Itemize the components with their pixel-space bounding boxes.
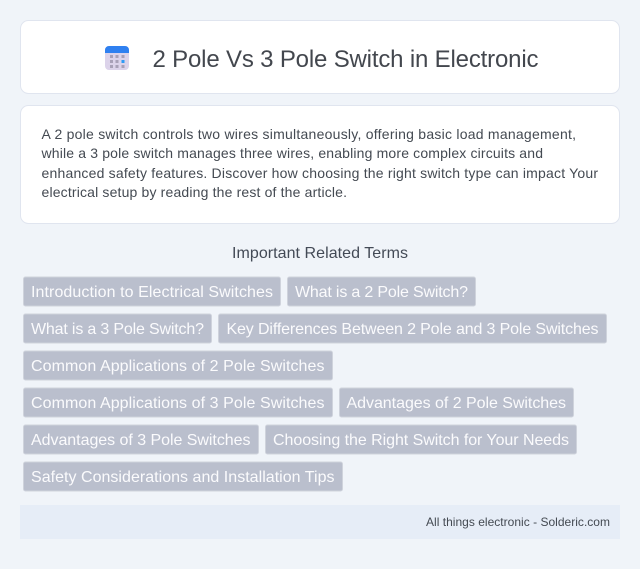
- footer: All things electronic - Solderic.com: [426, 515, 610, 529]
- footer: [20, 505, 620, 539]
- tag: applications of 2 pole: Common Applications of 2 Pole Switches: [31, 358, 324, 375]
- tag: choosing the right switch: [266, 425, 576, 454]
- tag group: related terms: [24, 277, 606, 491]
- panel: summary: [20, 106, 620, 224]
- tag: advantages of 3 pole: [24, 425, 258, 454]
- heading: important related terms: Important Related Terms: [232, 245, 408, 262]
- summary text: A 2 pole switch controls two wires simultaneously, offering basic load management,: [42, 126, 576, 142]
- tag: choosing the right switch: Choosing the Right Switch for Your Needs: [273, 432, 569, 449]
- tag: advantages of 2 pole: Advantages of 2 Pole Switches: [346, 395, 566, 412]
- tag: what is a 2 pole switch: [288, 277, 476, 306]
- tag: what is a 3 pole switch: What is a 3 Pole Switch?: [31, 321, 204, 338]
- tag: key differences: [218, 314, 606, 343]
- tag: applications of 3 pole: Common Applications of 3 Pole Switches: [31, 395, 324, 412]
- tag: what is a 2 pole switch: What is a 2 Pole Switch?: [295, 284, 468, 301]
- tag: introduction: Introduction to Electrical Switches: [31, 284, 273, 301]
- tag: applications of 3 pole: [24, 388, 332, 417]
- summary text: enhanced safety features. Discover how choosing the right switch type can impact Your: [42, 165, 598, 181]
- tag: key differences: Key Differences Between 2 Pole and 3 Pole Switches: [226, 321, 598, 338]
- tag: what is a 3 pole switch: [24, 314, 212, 343]
- title: 2 Pole Vs 3 Pole Switch in Electronic: [152, 46, 538, 73]
- tag: introduction: [24, 277, 280, 306]
- summary text: while a 3 pole switch manages three wires, enabling more complex circuits and: [40, 145, 543, 161]
- summary text: electrical setup by reading the rest of the article.: [42, 184, 347, 200]
- summary text: [40, 126, 598, 200]
- tag: safety considerations: [24, 462, 342, 491]
- tag: safety considerations: Safety Considerations and Installation Tips: [31, 469, 334, 486]
- panel: title header: [20, 20, 620, 94]
- tag: applications of 2 pole: [24, 351, 332, 380]
- tag: advantages of 3 pole: Advantages of 3 Pole Switches: [31, 432, 250, 449]
- tag: advantages of 2 pole: [340, 388, 574, 417]
- icon: calendar: [105, 46, 129, 70]
